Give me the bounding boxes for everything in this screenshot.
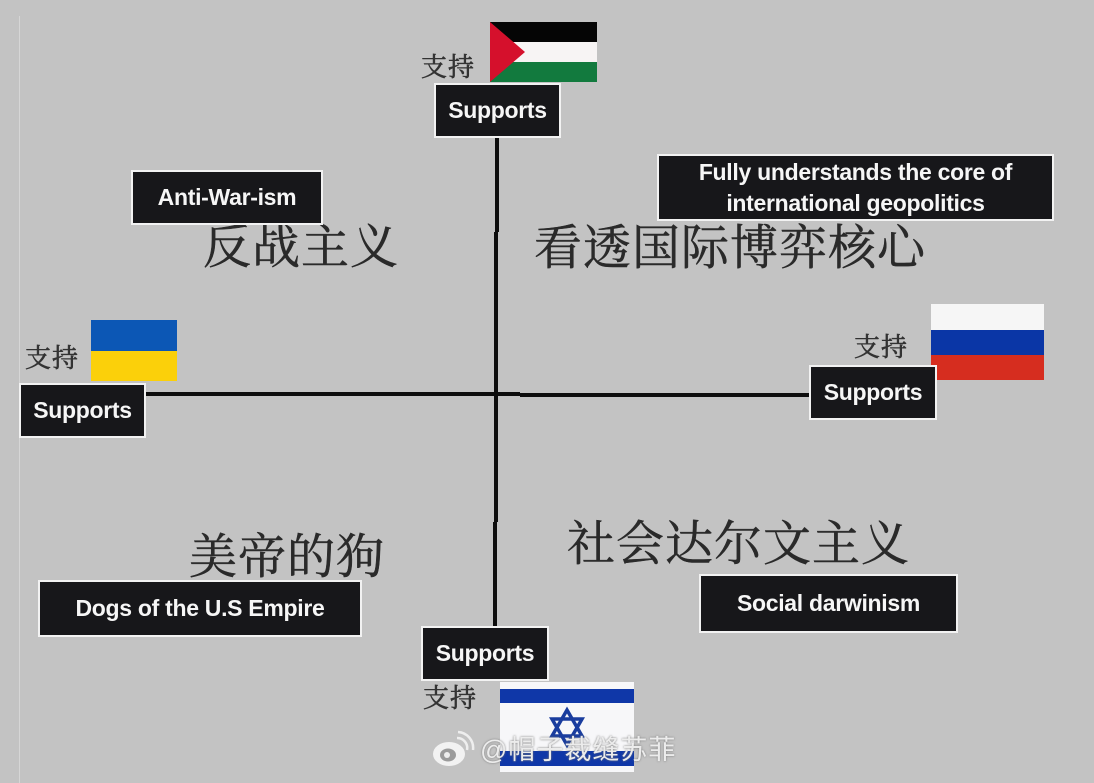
caption: geopolitics: international geopolitics xyxy=(726,190,985,216)
icon: Russia flag xyxy=(931,304,1044,380)
right group: Russia xyxy=(809,304,1044,420)
top group: Palestine xyxy=(421,22,597,138)
bottom group: Israel xyxy=(421,626,634,772)
caption: supports: Supports xyxy=(448,97,547,123)
caption: social darwinism: Social darwinism xyxy=(737,590,920,616)
quadrant label: anti-war-ism Chinese: 反战主义 xyxy=(203,208,399,277)
caption: supports: Supports xyxy=(436,640,534,666)
caption: anti-war-ism xyxy=(131,170,323,225)
caption: geopolitics: Fully understands the core of xyxy=(699,158,1012,184)
label: supports Chinese: 支持 xyxy=(854,327,908,364)
quadrant label: dogs of US empire Chinese: 美帝的狗 xyxy=(189,518,385,587)
label: supports Chinese: 支持 xyxy=(25,338,79,375)
icon: Ukraine flag xyxy=(91,320,177,381)
left group: Ukraine xyxy=(19,320,177,438)
watermark text: @帽子裁缝苏菲 xyxy=(480,735,676,765)
label: supports Chinese: 支持 xyxy=(421,47,475,84)
caption: geopolitics xyxy=(657,154,1054,221)
caption: social darwinism xyxy=(699,574,958,633)
icon: Weibo logo xyxy=(433,730,474,766)
quadrant label: geopolitics Chinese: 看透国际博弈核心 xyxy=(534,209,926,278)
icon: Israel flag xyxy=(500,682,634,772)
quadrant label: social darwinism Chinese: 社会达尔文主义 xyxy=(567,505,910,574)
left margin edge line xyxy=(19,16,20,783)
caption: anti-war-ism: Anti-War-ism xyxy=(158,184,296,210)
caption: supports xyxy=(434,83,561,138)
caption: supports xyxy=(809,365,937,420)
caption: supports xyxy=(421,626,549,681)
caption: dogs of the US empire xyxy=(38,580,362,637)
caption: supports xyxy=(19,383,146,438)
icon: Palestine flag xyxy=(490,22,597,82)
caption: supports: Supports xyxy=(33,397,132,423)
label: supports Chinese: 支持 xyxy=(423,678,477,715)
watermark: Weibo handle xyxy=(433,730,676,766)
caption: supports: Supports xyxy=(824,379,922,405)
caption: dogs of the US empire: Dogs of the U.S Empire xyxy=(76,595,324,621)
